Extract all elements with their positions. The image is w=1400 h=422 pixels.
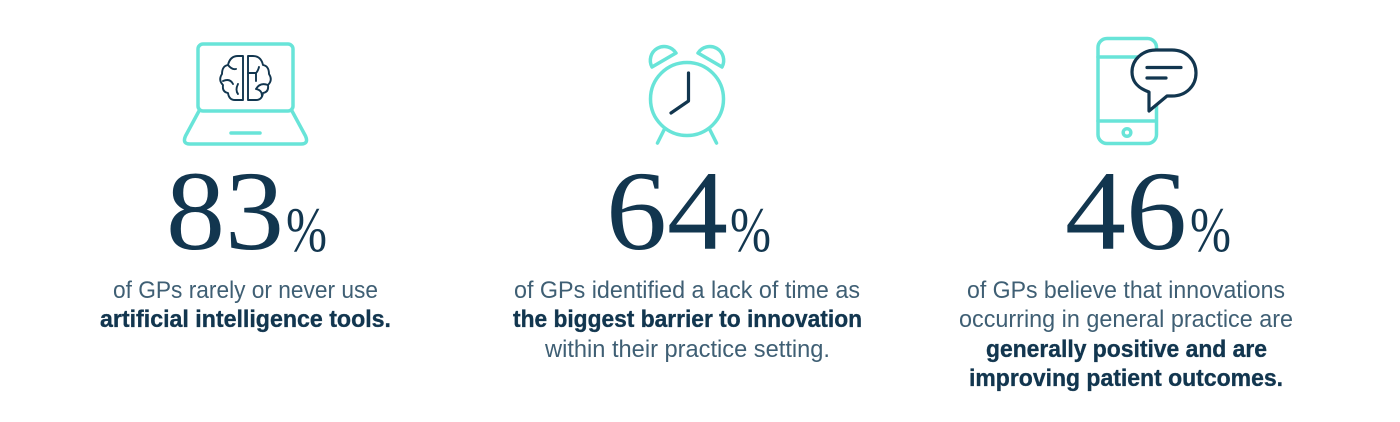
description text: generally positive and are bbox=[986, 336, 1267, 363]
description text bbox=[513, 277, 862, 363]
big number 64: 64 bbox=[606, 149, 728, 274]
description text: of GPs believe that innovations bbox=[967, 277, 1285, 304]
icon: laptop with brain bbox=[184, 44, 307, 144]
panel: lack of time statistic bbox=[513, 46, 862, 363]
description text: improving patient outcomes. bbox=[969, 365, 1283, 392]
icon: alarm clock bbox=[650, 46, 724, 143]
description text: the biggest barrier to innovation bbox=[513, 306, 862, 333]
description text: of GPs identified a lack of time as bbox=[514, 277, 860, 304]
description text: within their practice setting. bbox=[544, 336, 830, 363]
description text: occurring in general practice are bbox=[959, 306, 1293, 333]
description text: of GPs rarely or never use bbox=[113, 277, 378, 304]
panel: positive innovations statistic bbox=[959, 38, 1293, 392]
description text bbox=[100, 277, 391, 333]
percent sign: % bbox=[730, 194, 771, 265]
percent sign: % bbox=[1190, 194, 1231, 265]
icon: brain bbox=[220, 56, 271, 100]
description text: artificial intelligence tools. bbox=[100, 306, 391, 333]
description text bbox=[959, 277, 1293, 392]
big number 46: 46 bbox=[1065, 149, 1187, 274]
big number 83: 83 bbox=[166, 149, 284, 274]
percent sign: % bbox=[286, 194, 327, 265]
panel: artificial intelligence statistic bbox=[100, 44, 391, 333]
icon: phone with speech bubble bbox=[1098, 38, 1196, 144]
